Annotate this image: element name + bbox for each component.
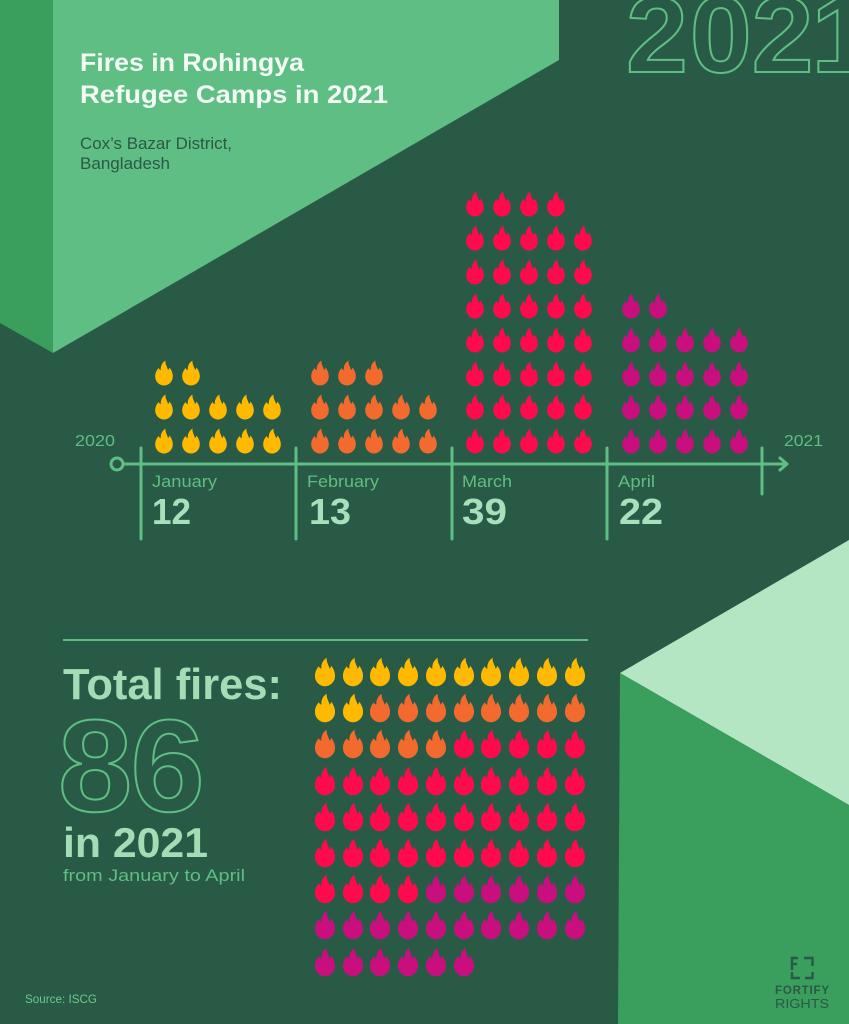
panel: top left dark facet [0,0,53,353]
month label: March 39: March [462,473,512,491]
heading: Total fires: Total fires: [63,660,282,709]
title: Refugee Camps in 2021 [80,81,388,109]
text: in 2021: in 2021 [63,819,208,866]
title: Fires in Rohingya [80,49,305,77]
month label: March 39 [462,473,512,532]
month label: January 12: January [152,473,218,491]
month label: February 13: 13 [309,491,351,532]
panel: top header facet [53,0,559,353]
subtitle: location [80,135,232,173]
logo: Fortify Rights: FORTIFY [775,985,829,997]
flame column: January 12 fires [155,360,281,454]
month label: January 12: 12 [152,491,191,532]
text: from January to April: from January to April [63,866,245,885]
axis label 2020: 2020 [75,433,115,450]
month label: April 22 [618,473,663,532]
month label: February 13 [307,473,380,532]
large outlined total 86: 86 [58,693,205,840]
row group: January fires [315,658,585,722]
timeline axis [111,448,787,539]
flame column: April 22 fires [622,294,748,454]
month label: March 39: 39 [462,491,507,532]
month label: February 13: February [307,473,380,491]
logo: Fortify Rights [775,958,829,1011]
row group: February fires [315,694,585,758]
subtitle: location: Cox’s Bazar District, [80,135,232,153]
flame column: March 39 fires [466,192,592,454]
flame grid: all 86 fires [315,658,585,976]
icon: logo frame [792,958,812,978]
flame column: February 13 fires [311,360,437,454]
panel: bottom right pale facet [620,540,849,805]
logo: Fortify Rights: RIGHTS [775,996,829,1011]
row group: April fires [315,875,585,976]
month label: January 12 [152,473,218,532]
month label: April 22: April [618,473,655,491]
month label: April 22: 22 [619,491,663,532]
subtitle: location: Bangladesh [80,155,170,173]
title [80,49,388,109]
row group: March fires [315,730,585,903]
source note: Source: ISCG [25,992,97,1006]
panel: bottom right green facet [618,673,849,1024]
axis label 2021: 2021 [784,433,823,450]
